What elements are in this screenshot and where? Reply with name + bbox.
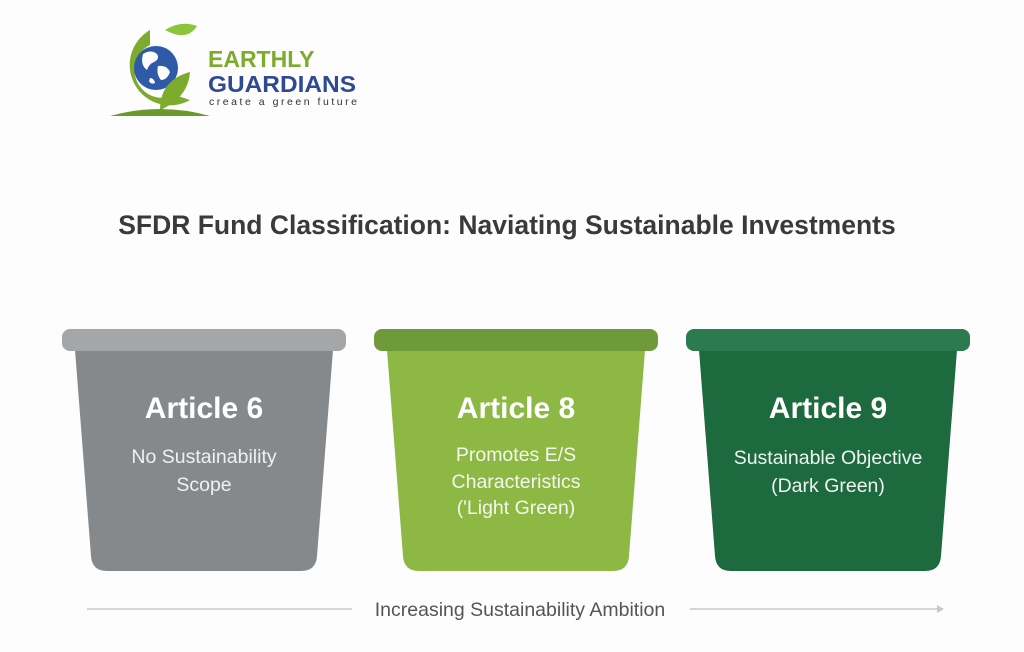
bucket: Article 6: No Sustainability [131, 446, 277, 468]
bucket: Article 9: Article 9 [769, 392, 887, 425]
bucket: Article 8: Promotes E/S [456, 444, 576, 466]
bucket: Article 8: Characteristics [452, 471, 581, 493]
bucket: Article 6: Scope [176, 474, 232, 496]
bucket: Article 9: (Dark Green) [771, 475, 885, 497]
bucket: Article 9: Sustainable Objective [734, 447, 922, 469]
arrow: increasing ambition [87, 599, 944, 621]
arrow: increasing ambition: Increasing Sustainability Ambition [375, 599, 665, 621]
title: SFDR Fund Classification: Naviating Sustainable Investments [118, 210, 896, 240]
bucket: Article 8: ('Light Green) [457, 497, 575, 519]
bucket: Article 6 [62, 329, 346, 571]
logo [110, 24, 357, 116]
icon: globe with leaf [110, 24, 210, 116]
bucket: Article 6: Article 6 [145, 392, 263, 425]
bucket: Article 8: Article 8 [457, 392, 575, 425]
bucket: Article 8 [374, 329, 658, 571]
logo: GUARDIANS [208, 71, 356, 97]
logo text: EARTHLY [208, 46, 314, 72]
bucket: Article 9 [686, 329, 970, 571]
logo: create a green future [209, 96, 357, 108]
